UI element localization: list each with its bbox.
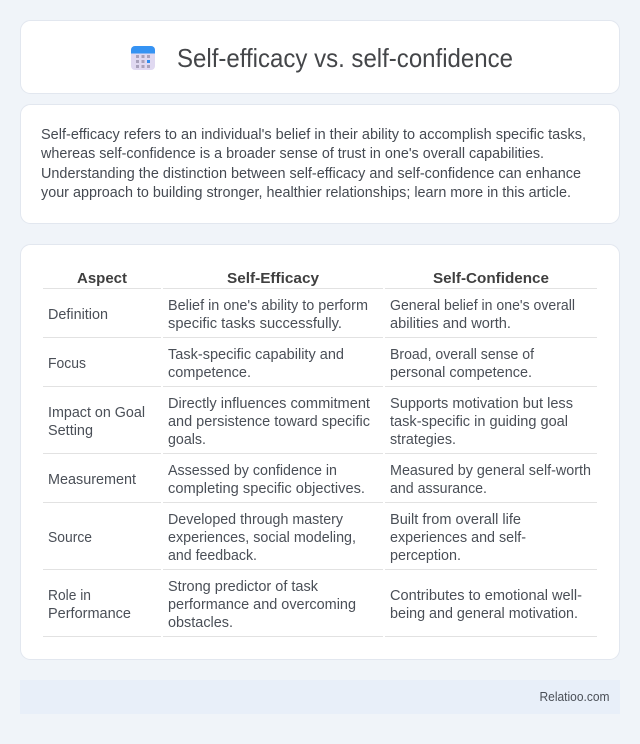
row: measurement: and assurance. [390,481,487,497]
row: source: and feedback. [168,548,257,564]
panel: comparison table [20,244,620,660]
row: definition: specific tasks successfully. [168,316,342,332]
row: role in performance: Contributes to emotional well- [390,588,582,604]
row: definition [48,298,575,332]
text block: introduction [40,127,586,201]
footer: Relatioo.com [540,690,610,704]
row: impact on goal setting: task-specific in guiding goal [390,414,568,430]
row: impact on goal setting [48,396,573,448]
row: source: Built from overall life [390,512,521,528]
row: focus: Focus [48,356,86,372]
row: impact on goal setting: goals. [168,432,206,448]
row: definition: abilities and worth. [390,316,511,332]
panel: title header [20,20,620,94]
row: role in performance: Strong predictor of task [168,579,319,595]
text block: introduction: Understanding the distinction between self-efficacy and self-confidence can enhance [41,166,581,182]
row: source: perception. [390,548,461,564]
row dividers [43,288,597,637]
row: focus: Task-specific capability and [168,347,344,363]
row: source [48,512,526,564]
text block: introduction: your approach to building stronger, healthier relationships; learn more in this article. [41,185,571,201]
row: focus: competence. [168,365,251,381]
row: role in performance: performance and overcoming [168,597,356,613]
row: measurement [48,463,591,497]
table header: Self-Confidence [433,270,549,287]
row: measurement: Measured by general self-worth [390,463,591,479]
text block: introduction: Self-efficacy refers to an individual's belief in their ability to accomplish specific tasks, [41,127,586,143]
footer [20,680,620,714]
table header [77,270,549,287]
row: focus: Broad, overall sense of [390,347,534,363]
title: Self-efficacy vs. self-confidence [177,43,513,73]
row: role in performance: Role in [48,588,91,604]
row: impact on goal setting: Supports motivation but less [390,396,573,412]
row: measurement: Assessed by confidence in [168,463,337,479]
row: focus: personal competence. [390,365,532,381]
row: role in performance: Performance [48,606,131,622]
row: focus [48,347,534,381]
row: source: Source [48,530,92,546]
row: impact on goal setting: strategies. [390,432,456,448]
table header: Self-Efficacy [227,270,320,287]
row: impact on goal setting: Setting [48,423,93,439]
row: measurement: Measurement [48,472,136,488]
row: impact on goal setting: Impact on Goal [48,405,145,421]
row: definition: Belief in one's ability to perform [168,298,368,314]
row: source: experiences, social modeling, [168,530,356,546]
row: definition: General belief in one's overall [390,298,575,314]
row: impact on goal setting: Directly influences commitment [168,396,370,412]
icon: calendar [131,46,155,70]
table header: Aspect [77,270,127,287]
row: source: experiences and self- [390,530,526,546]
row: measurement: completing specific objectives. [168,481,365,497]
row: role in performance: being and general motivation. [390,606,578,622]
text block: introduction: whereas self-confidence is a broader sense of trust in one's overall capabilities. [40,146,544,162]
row: role in performance [48,579,582,631]
panel: introduction [20,104,620,224]
row: definition: Definition [48,307,108,323]
row: impact on goal setting: and persistence toward specific [168,414,370,430]
row: source: Developed through mastery [168,512,344,528]
row: role in performance: obstacles. [168,615,233,631]
